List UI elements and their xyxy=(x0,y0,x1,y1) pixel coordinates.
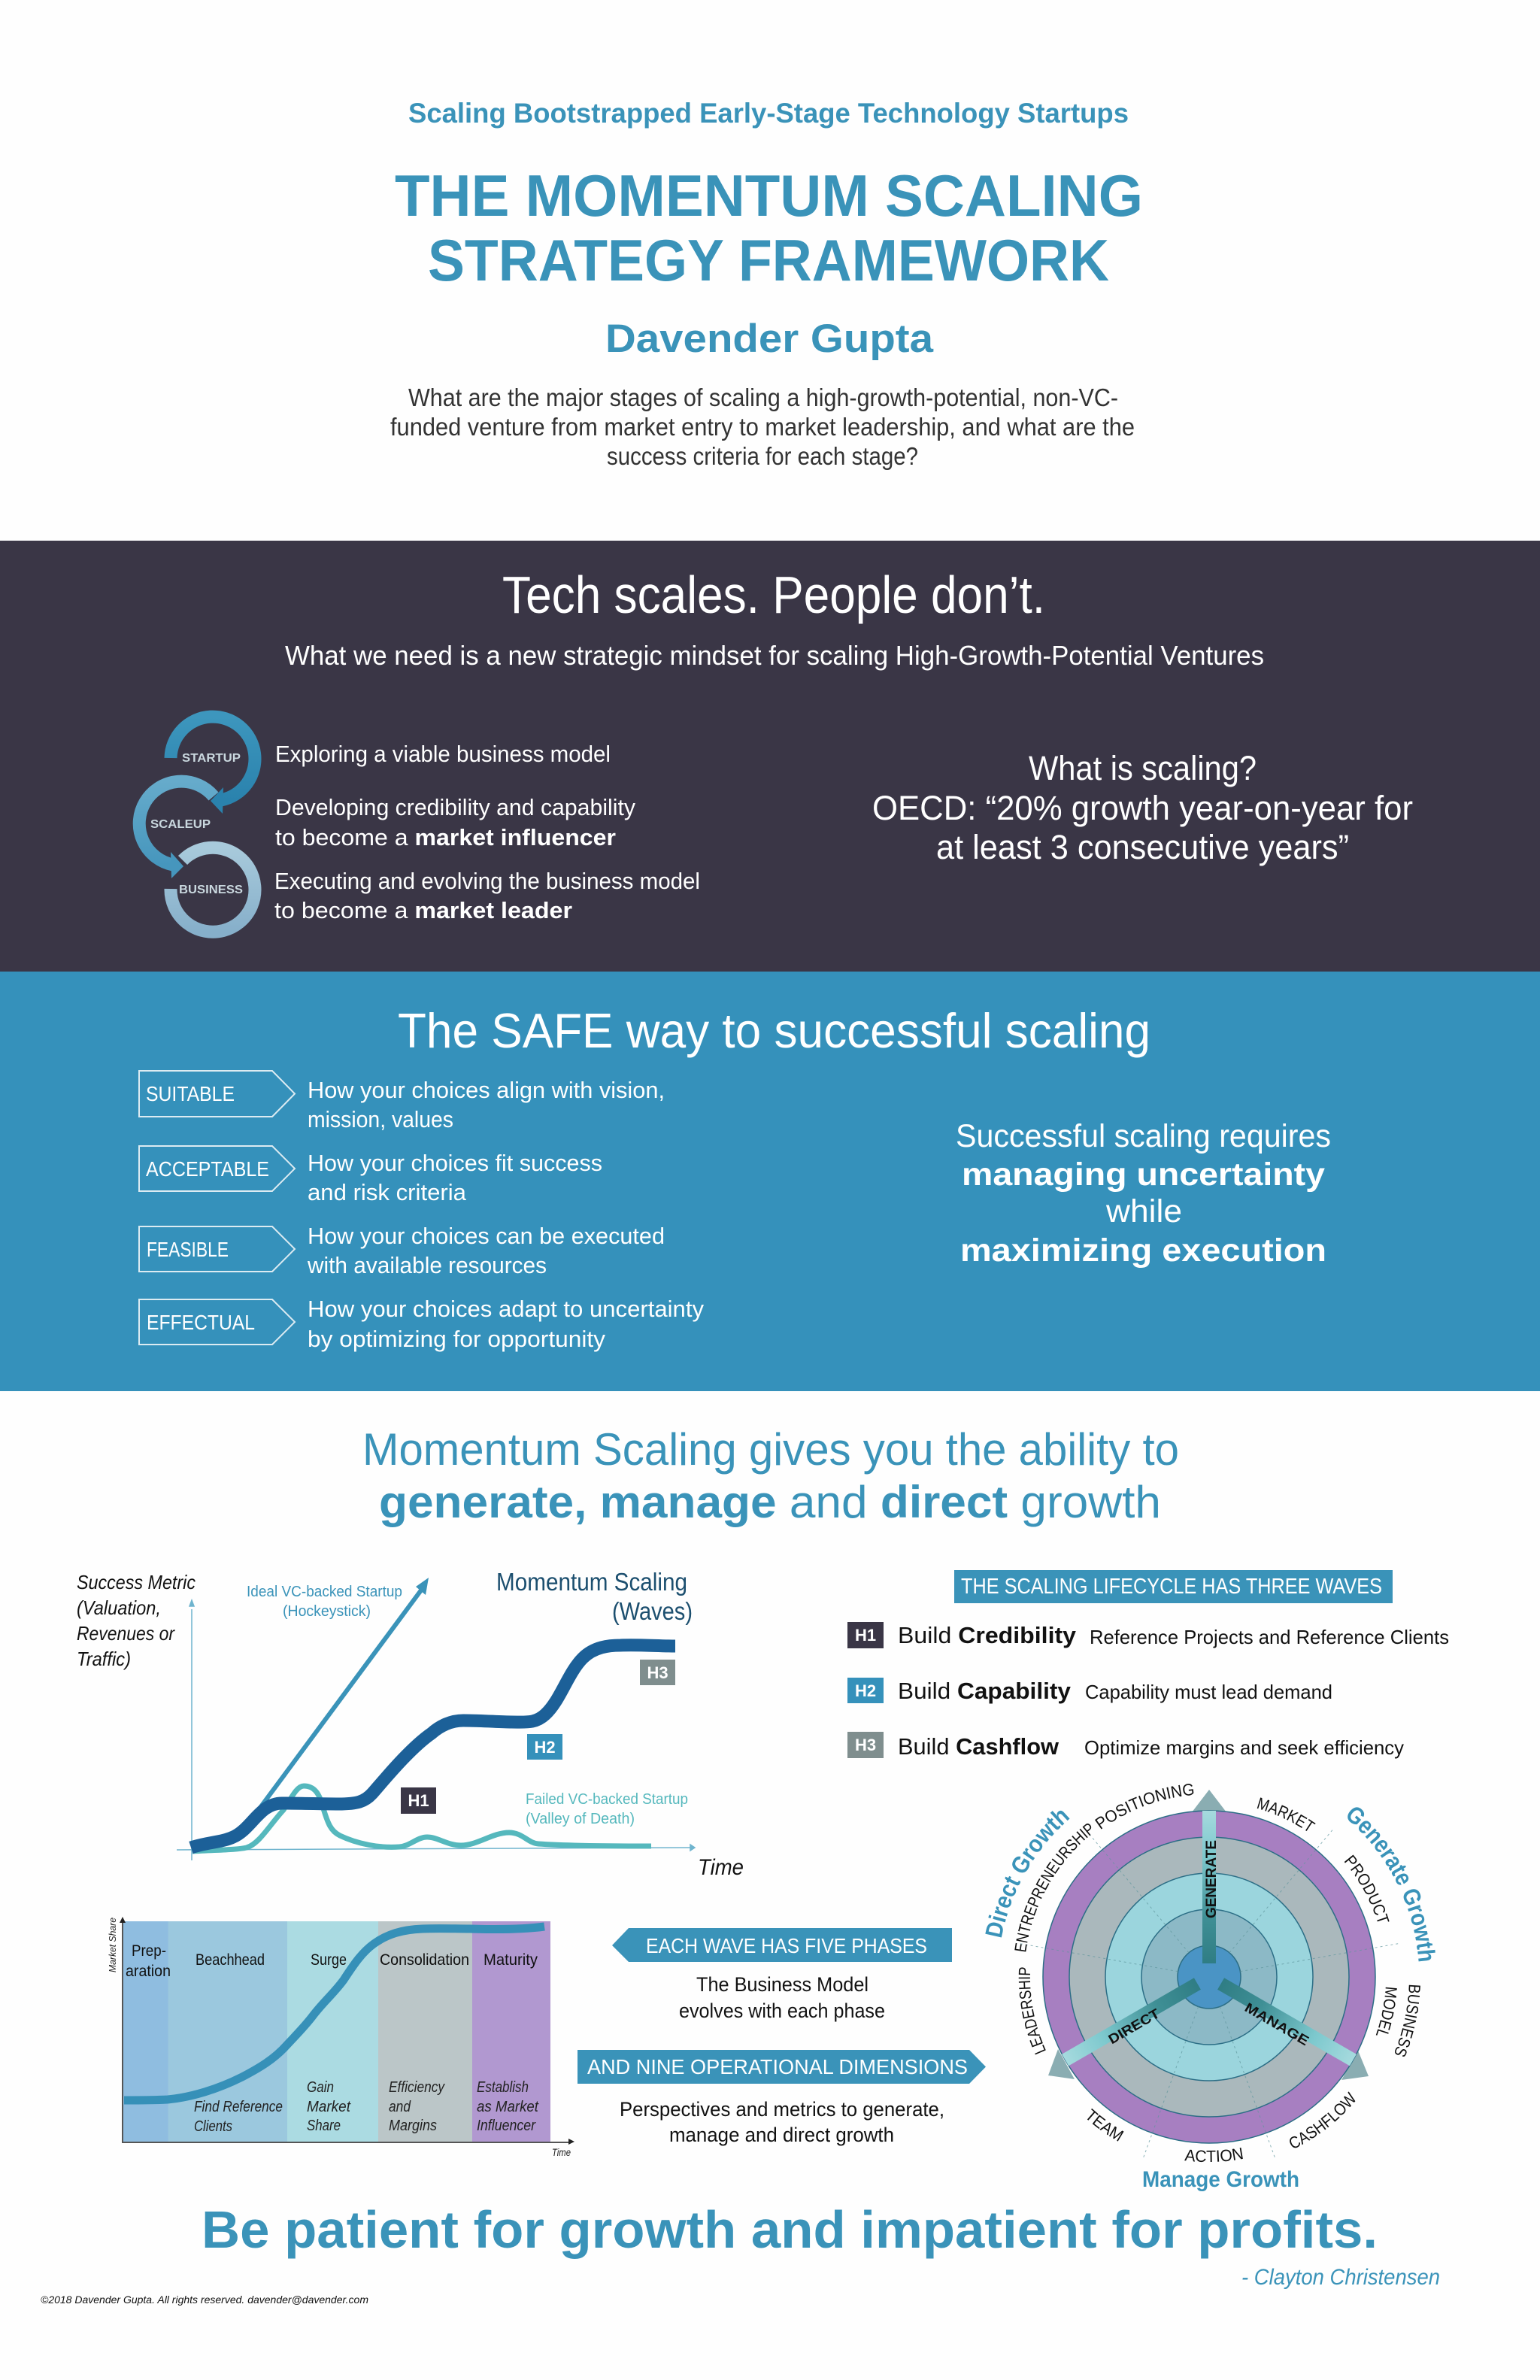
dimension labels xyxy=(1014,1784,1420,2163)
label: momentum scaling xyxy=(496,1568,693,1625)
section heading: momentum scaling: generate, manage and direct growth xyxy=(379,1477,1161,1527)
section heading: momentum scaling xyxy=(362,1424,1179,1527)
main title xyxy=(395,162,1143,293)
phase goals: Find Reference xyxy=(194,2099,283,2115)
axis label: success metric: Traffic) xyxy=(77,1648,131,1670)
row: H3 cashflow xyxy=(847,1732,1404,1760)
phase goals: and xyxy=(389,2099,411,2115)
tag: suitable xyxy=(139,1071,295,1117)
phase goals: Market xyxy=(307,2099,351,2115)
tag: H2: H2 xyxy=(534,1738,556,1757)
phase names: Surge xyxy=(311,1951,347,1969)
SAFE descriptions: with available resources xyxy=(307,1252,547,1278)
tag: H1 xyxy=(401,1787,436,1814)
intro question: success criteria for each stage? xyxy=(607,442,918,470)
SAFE descriptions: mission, values xyxy=(308,1106,453,1132)
label: ideal startup: (Hockeystick) xyxy=(283,1603,371,1620)
text: perspectives: Perspectives and metrics to generate, xyxy=(620,2098,944,2121)
chart axes xyxy=(177,1600,695,1860)
phase names: Beachhead xyxy=(196,1951,265,1969)
SAFE descriptions: and risk criteria xyxy=(308,1179,467,1205)
chart: nine dimension radar wheel xyxy=(985,1784,1435,2192)
icon labels: BUSINESS xyxy=(179,884,243,896)
text: business model xyxy=(679,1973,885,2022)
dimension dividers xyxy=(1018,1828,1400,2159)
icon: business ring xyxy=(171,847,255,932)
tag: H2 xyxy=(527,1734,562,1760)
icon: startup arrow xyxy=(171,717,255,814)
intro question: funded venture from market entry to market leadership, and what are the xyxy=(390,413,1135,441)
phase goals: Gain xyxy=(307,2079,334,2096)
panel heading: The SAFE way to successful scaling xyxy=(398,1003,1150,1058)
label: momentum scaling: Momentum Scaling xyxy=(496,1568,687,1596)
OECD definition xyxy=(872,749,1413,866)
phase goals: Efficiency xyxy=(389,2079,445,2096)
growth labels: Generate Growth xyxy=(1348,1807,1435,1961)
growth labels xyxy=(985,1807,1435,2192)
row: H2 capability: Build Capability xyxy=(898,1678,1072,1704)
tag: acceptable: ACCEPTABLE xyxy=(146,1157,269,1181)
row: H2 capability: H2 xyxy=(855,1681,876,1700)
dimension labels: POSITIONING xyxy=(1095,1784,1194,1829)
line: S-curve xyxy=(124,1927,544,2100)
tag: H3 xyxy=(640,1660,675,1685)
SAFE descriptions: How your choices can be executed xyxy=(308,1223,665,1249)
SAFE descriptions: How your choices adapt to uncertainty xyxy=(308,1296,705,1322)
arrowheads xyxy=(1048,1790,1369,2080)
row: H1 credibility: Reference Projects and Reference Clients xyxy=(1090,1626,1449,1648)
panel subheading: What we need is a new strategic mindset for scaling High-Growth-Potential Ventures xyxy=(285,640,1264,671)
arm: generate xyxy=(1202,1811,1220,1963)
quote attribution: - Clayton Christensen xyxy=(1241,2265,1440,2290)
dimension labels: MODEL xyxy=(1376,1987,1397,2036)
label: failed startup: (Valley of Death) xyxy=(526,1811,635,1827)
axis label: success metric: (Valuation, xyxy=(77,1596,161,1619)
subtitle: Scaling Bootstrapped Early-Stage Technology Startups xyxy=(408,98,1129,129)
tag: suitable: SUITABLE xyxy=(146,1082,235,1105)
arm: direct: DIRECT xyxy=(1106,2006,1162,2047)
text: perspectives xyxy=(620,2098,944,2146)
row: H3 cashflow: H3 xyxy=(855,1736,876,1754)
chart: momentum scaling waves xyxy=(77,1568,744,1880)
row: H3 cashflow: Build Cashflow xyxy=(898,1733,1060,1760)
dimension labels: MARKET xyxy=(1257,1797,1316,1831)
chart: five phases S-curve xyxy=(107,1917,574,2158)
icon labels: STARTUP xyxy=(182,752,241,765)
main title: THE MOMENTUM SCALING xyxy=(395,162,1143,229)
scaling statement: maximizing execution xyxy=(960,1232,1326,1269)
arrow: hockeystick line xyxy=(251,1578,429,1820)
row: H1 credibility xyxy=(847,1622,1449,1648)
row: H3 cashflow: Optimize margins and seek efficiency xyxy=(1084,1736,1404,1759)
phase goals xyxy=(194,2079,539,2135)
phase names: Prep- xyxy=(132,1942,166,1960)
copyright: ©2018 Davender Gupta. All rights reserved. davender@davender.com xyxy=(41,2294,368,2306)
label: ideal startup: Ideal VC-backed Startup xyxy=(247,1584,402,1600)
OECD definition: OECD: “20% growth year-on-year for xyxy=(872,789,1413,827)
panel: tech scales xyxy=(0,541,1540,972)
stage descriptions: to become a market influencer xyxy=(275,824,616,850)
SAFE descriptions: by optimizing for opportunity xyxy=(308,1326,606,1352)
stage descriptions: Executing and evolving the business model xyxy=(274,868,700,894)
arm: generate: GENERATE xyxy=(1204,1840,1220,1918)
panel: SAFE xyxy=(0,972,1540,1391)
text: perspectives: manage and direct growth xyxy=(669,2124,894,2146)
dimension labels: PRODUCT xyxy=(1344,1854,1390,1922)
tag: effectual: EFFECTUAL xyxy=(147,1311,255,1334)
scaling statement: while xyxy=(1105,1193,1182,1229)
icon labels xyxy=(150,752,243,896)
phase names: aration xyxy=(126,1963,171,1980)
row: H2 capability xyxy=(847,1678,1332,1704)
phase goals: Establish xyxy=(477,2079,529,2096)
banner: nine dimensions xyxy=(578,2050,986,2084)
SAFE descriptions: How your choices fit success xyxy=(308,1150,602,1176)
scaling statement: managing uncertainty xyxy=(962,1157,1325,1193)
banner: three waves xyxy=(954,1570,1393,1603)
tag: H1: H1 xyxy=(408,1791,429,1810)
growth labels: Manage Growth xyxy=(1142,2167,1299,2192)
row: H1 credibility: H1 xyxy=(855,1626,876,1645)
stage descriptions: to become a market leader xyxy=(274,897,572,923)
phase goals: Clients xyxy=(194,2118,232,2135)
intro question: What are the major stages of scaling a high-growth-potential, non-VC- xyxy=(408,384,1118,411)
dimension labels: TEAM xyxy=(1087,2109,1123,2142)
panel heading: Tech scales. People don’t. xyxy=(502,565,1045,624)
author: Davender Gupta xyxy=(605,317,934,361)
tag: acceptable xyxy=(139,1146,295,1191)
label: failed startup xyxy=(526,1791,688,1827)
phase goals: Influencer xyxy=(477,2118,536,2134)
header block xyxy=(390,98,1143,470)
dimension labels: LEADERSHIP xyxy=(1018,1967,1046,2054)
tag: feasible: FEASIBLE xyxy=(147,1238,229,1261)
closing quote: Be patient for growth and impatient for profits. xyxy=(202,2200,1378,2259)
banner: nine dimensions: AND NINE OPERATIONAL DIMENSIONS xyxy=(587,2055,968,2078)
banner: five phases: EACH WAVE HAS FIVE PHASES xyxy=(646,1934,927,1957)
tag: H3: H3 xyxy=(647,1663,668,1682)
line: failed startup curve xyxy=(192,1786,651,1851)
arm: manage xyxy=(1217,1978,1357,2066)
axis label: success metric: Revenues or xyxy=(77,1622,175,1645)
OECD definition: What is scaling? xyxy=(1029,749,1257,787)
text: business model: evolves with each phase xyxy=(679,2000,885,2022)
dimension labels: CASHFLOW xyxy=(1290,2091,1355,2148)
label: ideal startup xyxy=(247,1584,402,1620)
stage descriptions: Developing credibility and capability xyxy=(275,794,635,820)
section heading: momentum scaling: Momentum Scaling gives you the ability to xyxy=(362,1424,1179,1475)
phase goals: as Market xyxy=(477,2099,539,2115)
scaling statement xyxy=(956,1118,1331,1269)
SAFE tags xyxy=(139,1071,295,1345)
phase goals: Margins xyxy=(389,2118,437,2134)
tag: effectual xyxy=(139,1299,295,1345)
phase names xyxy=(126,1942,538,1980)
dimension labels: ENTREPRENEURSHIP xyxy=(1014,1824,1092,1952)
panel: three waves xyxy=(847,1570,1449,1760)
banner: five phases xyxy=(612,1928,952,1962)
wheel rings xyxy=(1043,1811,1375,2143)
label: momentum scaling: (Waves) xyxy=(612,1597,693,1625)
axis label: success metric: Success Metric xyxy=(77,1571,196,1593)
banner: three waves: THE SCALING LIFECYCLE HAS THREE WAVES xyxy=(961,1575,1382,1599)
line: momentum scaling curve xyxy=(191,1645,675,1848)
stage descriptions: Exploring a viable business model xyxy=(275,741,611,767)
stage descriptions xyxy=(274,741,700,923)
icon labels: SCALEUP xyxy=(150,818,211,831)
main title: STRATEGY FRAMEWORK xyxy=(428,227,1109,293)
scaling statement: Successful scaling requires xyxy=(956,1118,1331,1154)
arm: direct xyxy=(1062,1978,1201,2066)
axis label: time: Time xyxy=(698,1855,744,1880)
axis label: time: Time xyxy=(552,2146,571,2158)
SAFE descriptions: How your choices align with vision, xyxy=(308,1077,665,1103)
arm: manage: MANAGE xyxy=(1242,2000,1311,2048)
dimension labels: ACTION xyxy=(1184,2148,1243,2163)
phase bands xyxy=(123,1921,550,2142)
label: failed startup: Failed VC-backed Startup xyxy=(526,1791,688,1808)
intro question xyxy=(390,384,1135,470)
icon: scaleup arrow xyxy=(139,781,214,878)
dimension labels: BUSINESS xyxy=(1395,1985,1420,2057)
axis label: market share: Market Share xyxy=(107,1918,118,1972)
phase goals: Share xyxy=(307,2118,341,2134)
text: business model: The Business Model xyxy=(696,1973,869,1996)
OECD definition: at least 3 consecutive years” xyxy=(936,828,1349,866)
phase names: Consolidation xyxy=(380,1951,469,1969)
panel: five phases and nine dimensions xyxy=(578,1928,986,2146)
tag: feasible xyxy=(139,1226,295,1272)
axis label: success metric xyxy=(77,1571,196,1670)
row: H2 capability: Capability must lead demand xyxy=(1085,1681,1332,1703)
icon: startup scaleup business loops xyxy=(139,717,255,932)
SAFE descriptions xyxy=(307,1077,705,1352)
chart axes xyxy=(120,1917,574,2145)
row: H1 credibility: Build Credibility xyxy=(898,1622,1077,1648)
growth labels: Direct Growth xyxy=(985,1811,1069,1937)
phase names: Maturity xyxy=(484,1951,538,1969)
